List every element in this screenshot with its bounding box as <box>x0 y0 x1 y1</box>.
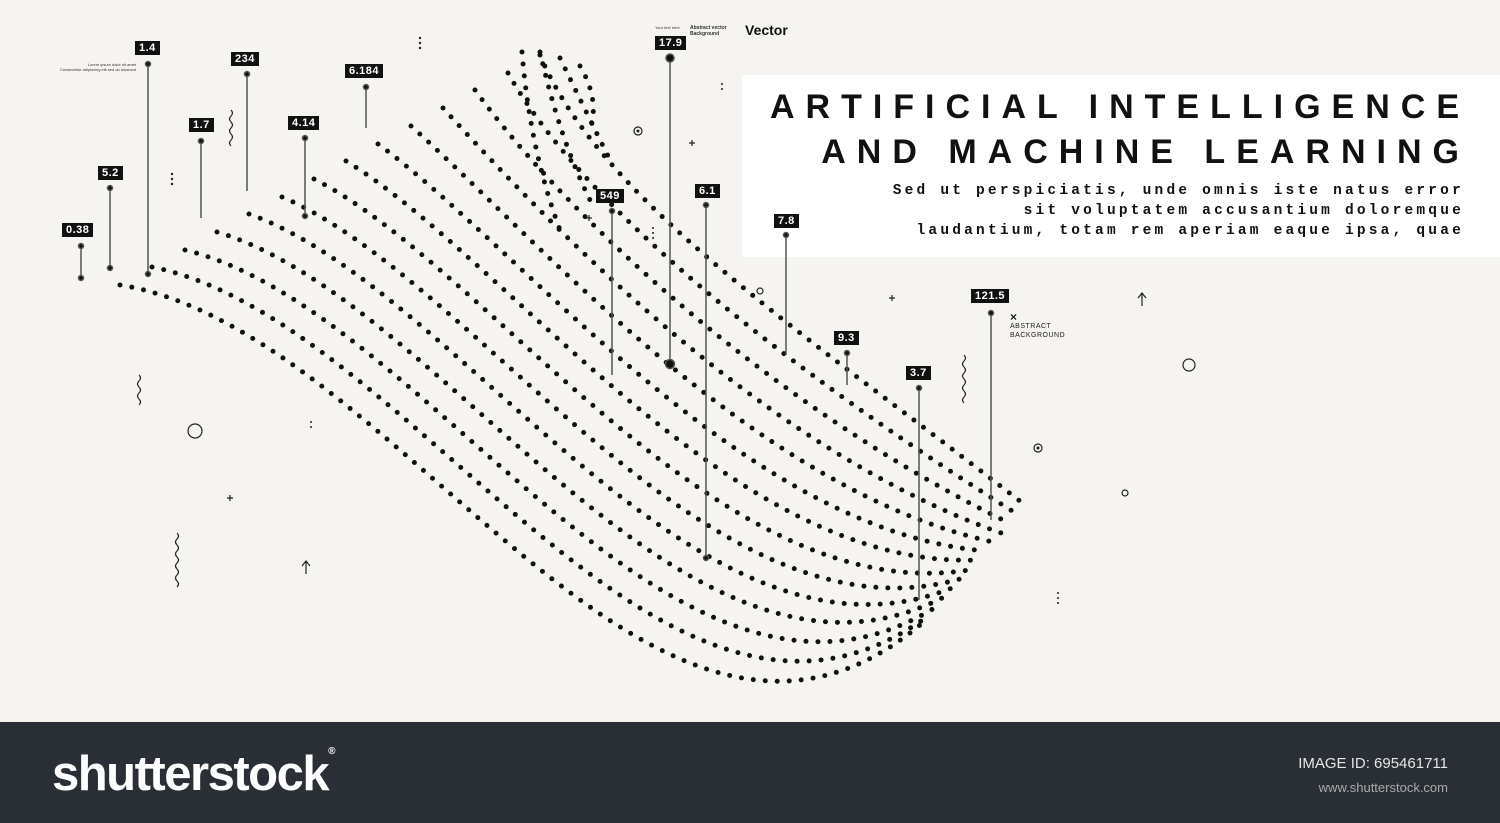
footer bar <box>0 722 1500 823</box>
body text <box>893 183 1464 239</box>
label 9.3: 9.3 <box>838 332 855 344</box>
label 4.14: 4.14 <box>292 117 315 129</box>
small caption left: Consectetur adipiscing elit sed do eiusmod <box>60 67 136 72</box>
small caption vector: Your text here <box>655 25 680 30</box>
body text: Sed ut perspiciatis, unde omnis iste natus error <box>893 183 1464 199</box>
label 121.5: 121.5 <box>975 290 1005 302</box>
label 5.2 <box>98 166 123 180</box>
small caption vector: Vector <box>745 22 788 38</box>
abstract background caption: BACKGROUND <box>1010 332 1065 339</box>
title <box>770 88 1470 171</box>
label 1.7: 1.7 <box>193 119 210 131</box>
label 6.184: 6.184 <box>349 65 379 77</box>
label 6.184 <box>345 64 383 78</box>
label 17.9: 17.9 <box>659 37 682 49</box>
label 0.38 <box>62 223 93 237</box>
brand logo: shutterstock® <box>52 746 334 801</box>
image id: IMAGE ID: 695461711 <box>1298 755 1448 772</box>
label 3.7 <box>906 366 931 380</box>
image id: www.shutterstock.com <box>1319 780 1448 795</box>
label 234 <box>231 52 259 66</box>
label 549 <box>596 189 624 203</box>
title: AND MACHINE LEARNING <box>821 133 1470 171</box>
title: ARTIFICIAL INTELLIGENCE <box>770 88 1470 126</box>
label 7.8: 7.8 <box>778 215 795 227</box>
label 121.5 <box>971 289 1009 303</box>
abstract background caption: ABSTRACT <box>1010 323 1051 330</box>
small caption vector: Abstract vector <box>690 25 727 31</box>
label 17.9 <box>655 36 686 50</box>
label 7.8 <box>774 214 799 228</box>
label 234: 234 <box>235 53 255 65</box>
body text: laudantium, totam rem aperiam eaque ipsa, quae <box>917 223 1464 239</box>
small caption left <box>60 62 136 72</box>
body text: sit voluptatem accusantium doloremque <box>1024 203 1464 219</box>
abstract background caption <box>1010 310 1065 339</box>
small caption left: Lorem ipsum dolor sit amet <box>88 62 136 67</box>
label 4.14 <box>288 116 319 130</box>
label 9.3 <box>834 331 859 345</box>
label 549: 549 <box>600 190 620 202</box>
small caption vector: Background <box>690 31 719 37</box>
label 1.4: 1.4 <box>139 42 156 54</box>
label 3.7: 3.7 <box>910 367 927 379</box>
label 5.2: 5.2 <box>102 167 119 179</box>
label 1.7 <box>189 118 214 132</box>
image id <box>1298 755 1448 795</box>
label 0.38: 0.38 <box>66 224 89 236</box>
abstract background caption: × <box>1010 310 1018 324</box>
title panel <box>742 75 1500 257</box>
label 6.1 <box>695 184 720 198</box>
small caption vector <box>655 22 788 38</box>
label 1.4 <box>135 41 160 55</box>
label 6.1: 6.1 <box>699 185 716 197</box>
